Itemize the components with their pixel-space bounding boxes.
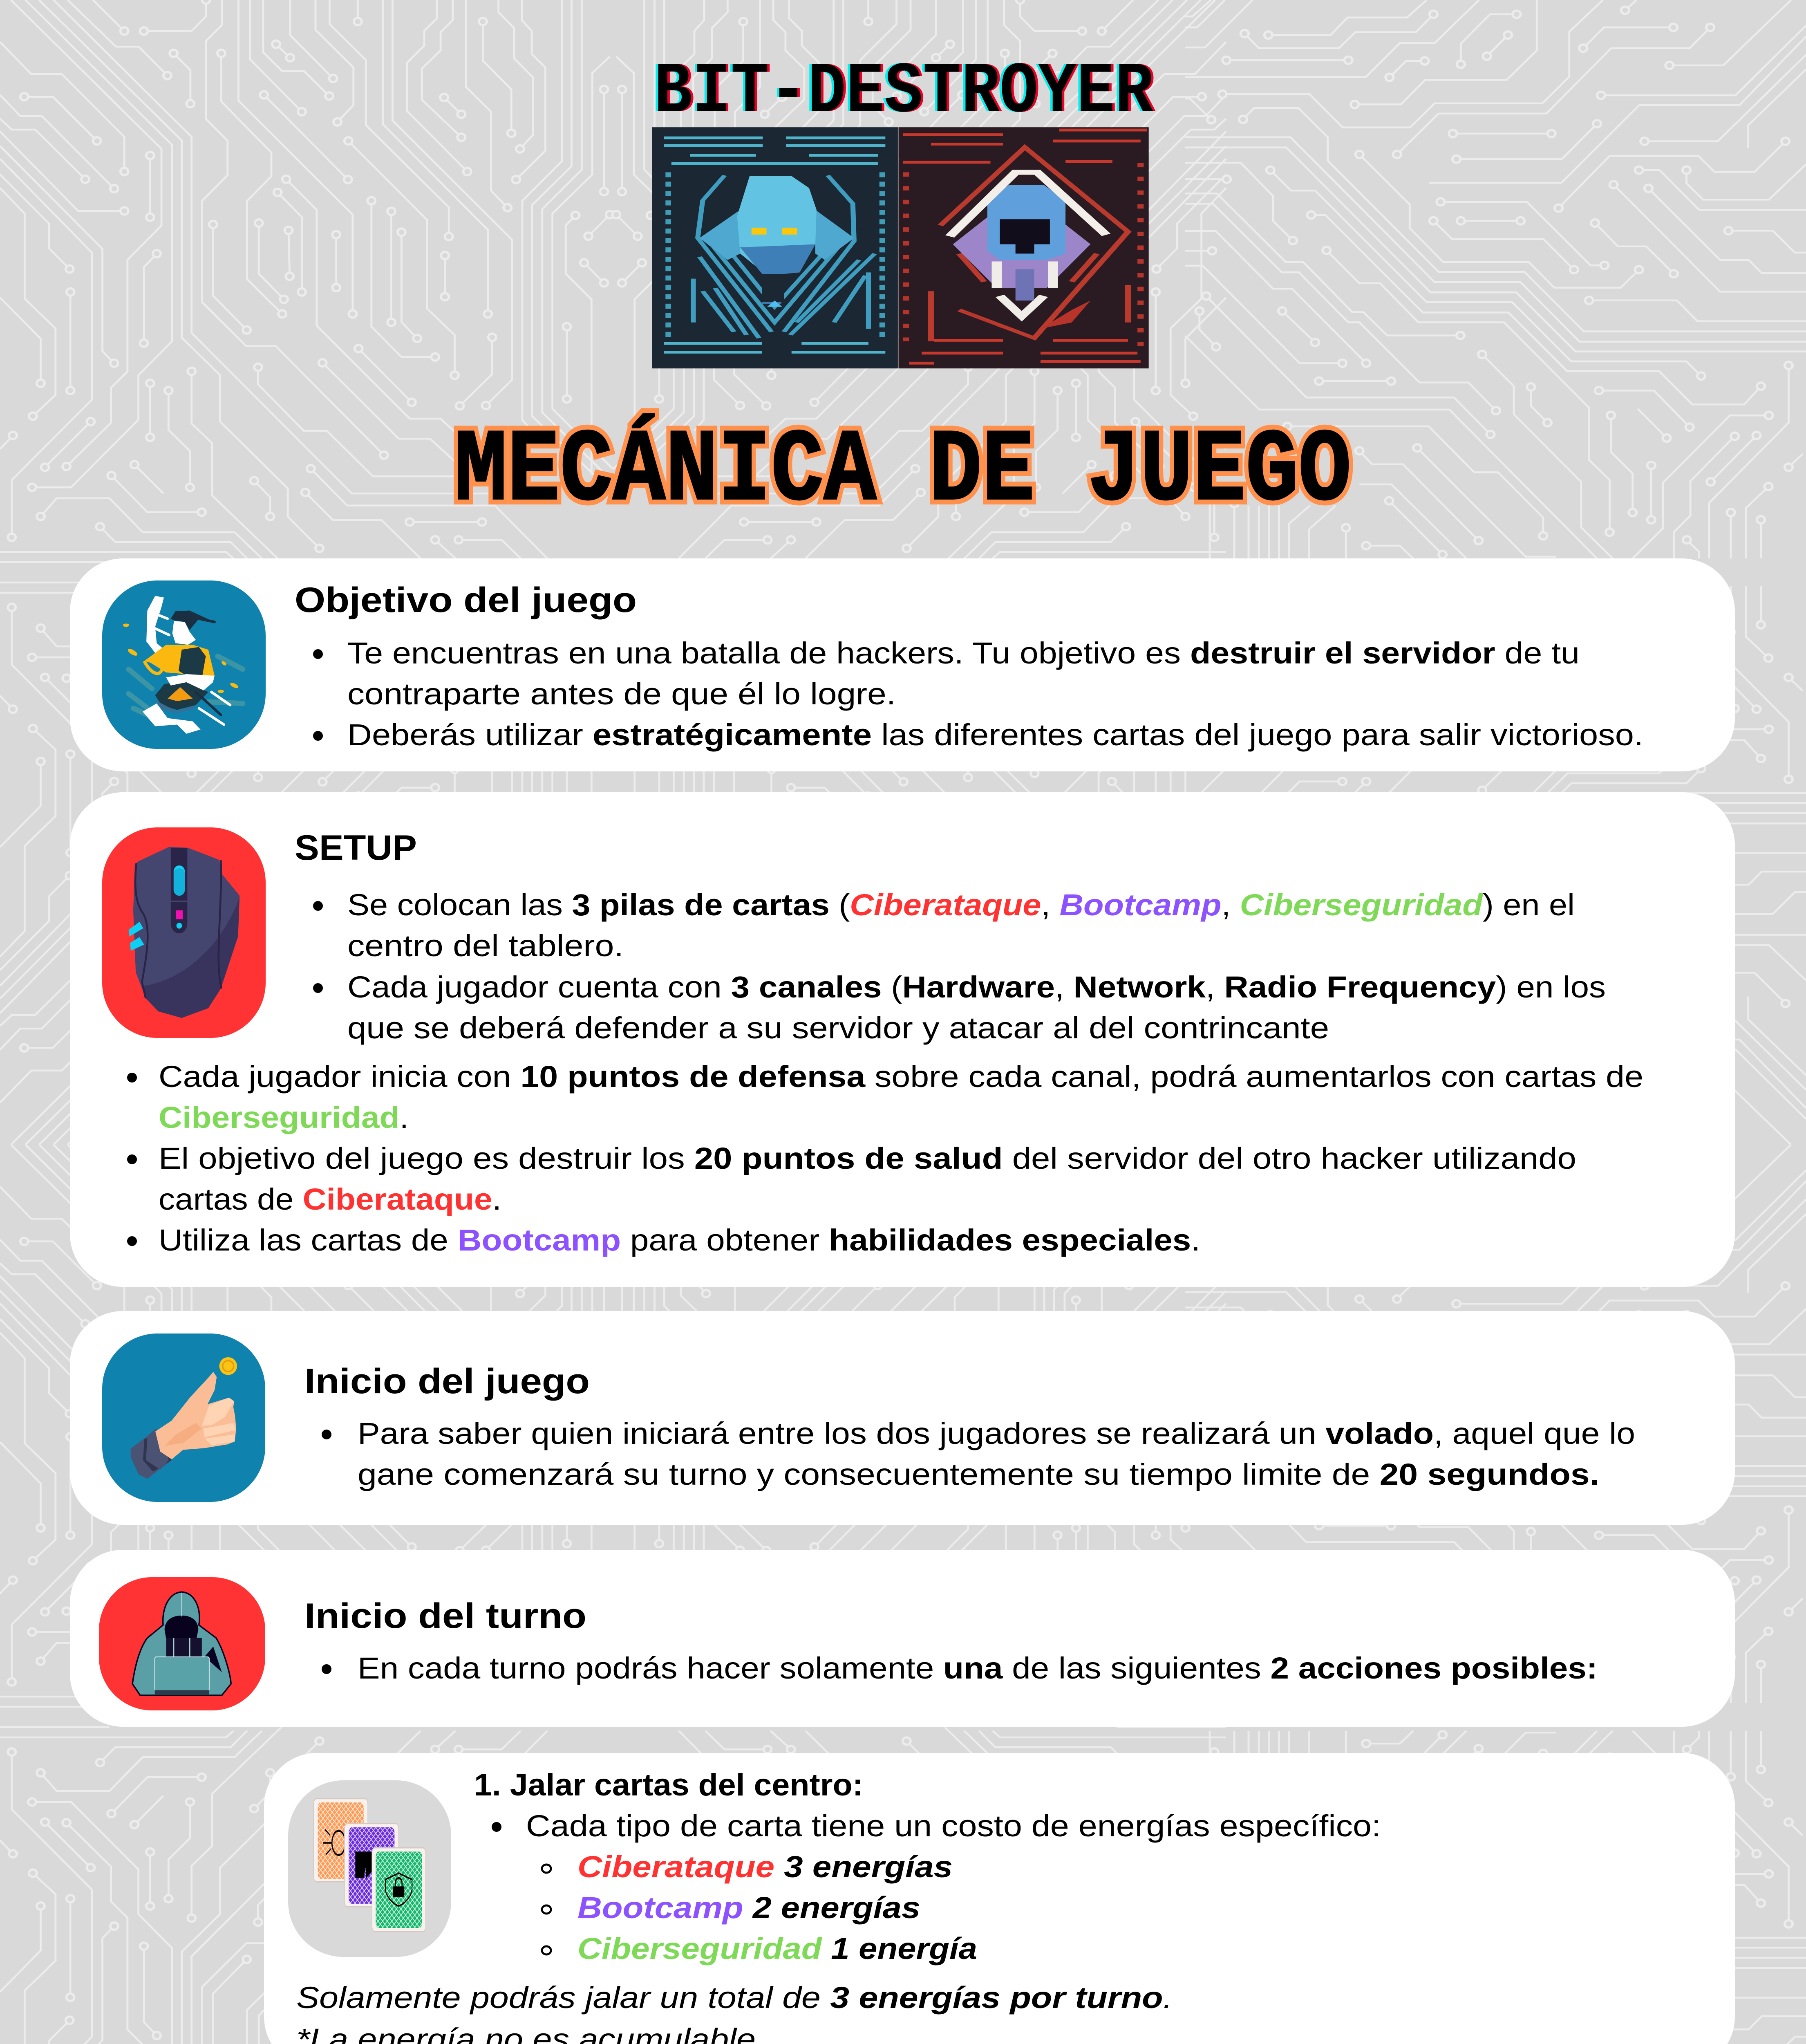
title: BIT-DESTROYER: BIT-DESTROYER [654, 51, 1153, 133]
bullet list: Deberás utilizar estratégicamente las diferentes cartas del juego para salir victorioso. [347, 718, 1643, 752]
bullet: En cada turno podrás hacer solamente una de las siguientes 2 acciones posibles: [358, 1651, 1598, 1685]
title: BIT-DESTROYER: BIT-DESTROYER [656, 51, 1156, 133]
icon: hacker with trophy [102, 580, 266, 749]
bullet list: full width: El objetivo del juego es destruir los 20 puntos de salud del servidor del otro hacker utilizando [159, 1141, 1576, 1175]
heading: Inicio del turno [304, 1596, 586, 1636]
bullet list: full width: Utiliza las cartas de Bootcamp para obtener habilidades especiales . [159, 1223, 1200, 1257]
note [296, 1981, 1173, 2044]
panel: inicio del juego [70, 1311, 1735, 1525]
bullet list: Para saber quien iniciará entre los dos jugadores se realizará un volado , aquel que lo [358, 1416, 1635, 1450]
bullet list: indented: que se deberá defender a su servidor y atacar al del contrincante [347, 1011, 1329, 1045]
bullet list: indented: centro del tablero. [347, 929, 624, 963]
bullet list: full width: cartas de Ciberataque . [159, 1182, 501, 1216]
heading: SETUP [295, 828, 417, 867]
cost list [492, 1809, 1381, 1966]
bullet list [322, 1416, 1635, 1491]
card back: red skull [898, 127, 1149, 368]
cost list: Ciberataque 3 energías [577, 1850, 953, 1884]
title: BIT-DESTROYER: BIT-DESTROYER [651, 51, 1151, 133]
bullet list: full width [127, 1060, 1643, 1257]
title: MECÁNICA DE JUEGO: MECÁNICA DE JUEGO [454, 414, 1351, 530]
icon: gaming mouse [102, 827, 266, 1038]
panel: objetivo del juego [70, 558, 1735, 771]
panel: jalar cartas del centro [264, 1753, 1735, 2044]
bullet list: full width: Cada jugador inicia con 10 puntos de defensa sobre cada canal, podrá aumentarlos con cartas de [159, 1060, 1643, 1094]
note: Solamente podrás jalar un total de 3 energías por turno . [296, 1981, 1173, 2015]
cost list: Bootcamp 2 energías [577, 1891, 920, 1925]
bullet list: indented [313, 888, 1606, 1045]
game card art [652, 127, 1149, 368]
bullet list: indented: Se colocan las 3 pilas de cartas (Ciberataque , Bootcamp , Ciberseguridad ) en el [347, 888, 1575, 922]
heading: Objetivo del juego [295, 580, 637, 620]
panel: setup [70, 792, 1735, 1287]
bullet list [313, 636, 1643, 752]
panel: inicio del turno [70, 1550, 1735, 1727]
bullet list: contraparte antes de que él lo logre. [347, 677, 896, 711]
card back: blue robot [652, 127, 898, 368]
icon: three cards [288, 1780, 451, 1957]
bullet list: full width: Ciberseguridad . [159, 1100, 409, 1134]
icon: hand flipping coin [102, 1334, 265, 1502]
bullet list: gane comenzará su turno y consecuentemente su tiempo limite de 20 segundos. [358, 1457, 1599, 1491]
cost list: Cada tipo de carta tiene un costo de energías específico: [526, 1809, 1381, 1843]
title: MECÁNICA DE JUEGO: MECÁNICA DE JUEGO [454, 414, 1351, 530]
heading: Inicio del juego [304, 1362, 590, 1401]
icon: hooded hacker [99, 1577, 265, 1710]
bullet list: indented: Cada jugador cuenta con 3 canales (Hardware , Network , Radio Frequency ) en los [347, 970, 1606, 1004]
heading: 1. Jalar cartas del centro: [474, 1768, 863, 1802]
bullet list: Te encuentras en una batalla de hackers. Tu objetivo es destruir el servidor de tu [347, 636, 1580, 670]
cost list: Ciberseguridad 1 energía [577, 1932, 977, 1966]
